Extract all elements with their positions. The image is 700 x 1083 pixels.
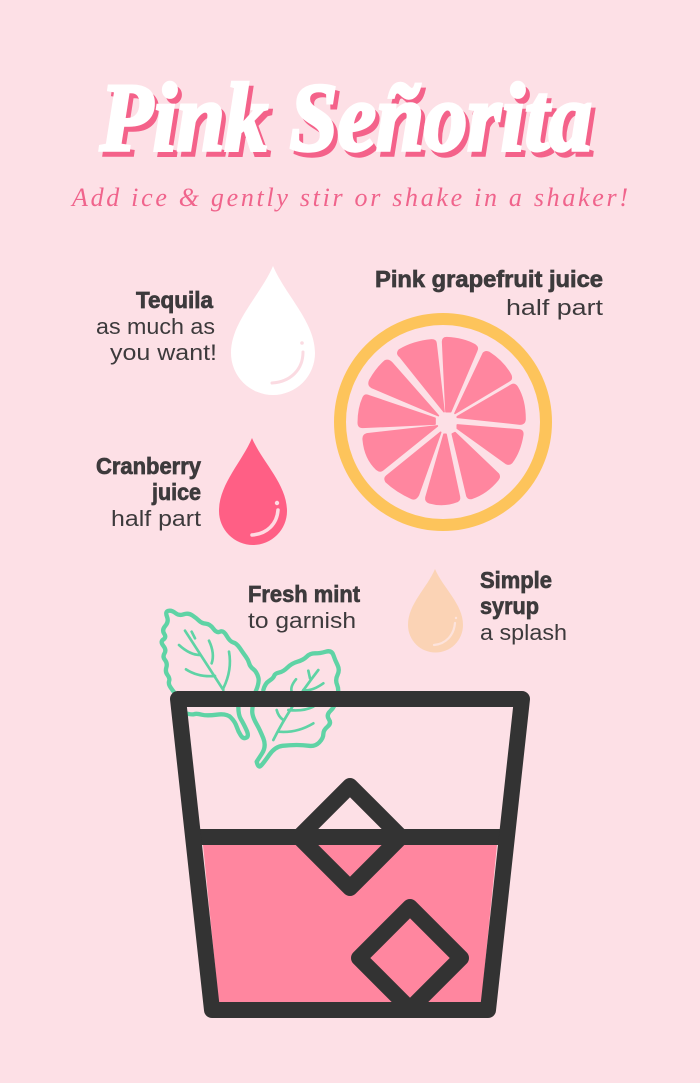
label: cranberry juice: juice bbox=[151, 479, 201, 505]
label: tequila: you want! bbox=[110, 340, 217, 365]
icon: mint leaves bbox=[162, 611, 339, 767]
label: simple syrup: Simple bbox=[480, 567, 552, 593]
icon: cranberry drop bbox=[219, 438, 287, 545]
icon: grapefruit slice bbox=[340, 319, 546, 525]
icon: glass with ice cubes bbox=[178, 699, 522, 1010]
label: simple syrup: a splash bbox=[480, 620, 567, 645]
drink liquid bbox=[203, 845, 497, 1005]
icon: syrup drop bbox=[408, 569, 463, 652]
label: tequila bbox=[96, 287, 217, 365]
ice cube upper bbox=[299, 786, 401, 888]
label: fresh mint: to garnish bbox=[248, 608, 356, 633]
glass outline bbox=[178, 699, 522, 1010]
label: pink grapefruit juice: Pink grapefruit juice bbox=[375, 266, 603, 292]
ice cube lower bbox=[359, 907, 461, 1009]
icon: white tequila drop bbox=[231, 266, 315, 395]
label: tequila: Tequila bbox=[136, 287, 213, 313]
label: pink grapefruit juice: half part bbox=[506, 295, 603, 320]
label: fresh mint bbox=[248, 581, 360, 633]
label: cranberry juice: half part bbox=[111, 506, 201, 531]
label: fresh mint: Fresh mint bbox=[248, 581, 360, 607]
label: tequila: as much as bbox=[96, 314, 215, 339]
liquid line bbox=[194, 829, 506, 845]
label: simple syrup bbox=[480, 567, 567, 645]
label: cranberry juice: Cranberry bbox=[96, 453, 201, 479]
label: simple syrup: syrup bbox=[480, 593, 539, 619]
label: pink grapefruit juice bbox=[375, 266, 603, 320]
title: Pink Señorita bbox=[103, 69, 596, 177]
subtitle: Add ice & gently stir or shake in a shaker! bbox=[70, 183, 628, 212]
label: cranberry juice bbox=[96, 453, 201, 531]
title: Pink Señorita bbox=[99, 64, 592, 172]
